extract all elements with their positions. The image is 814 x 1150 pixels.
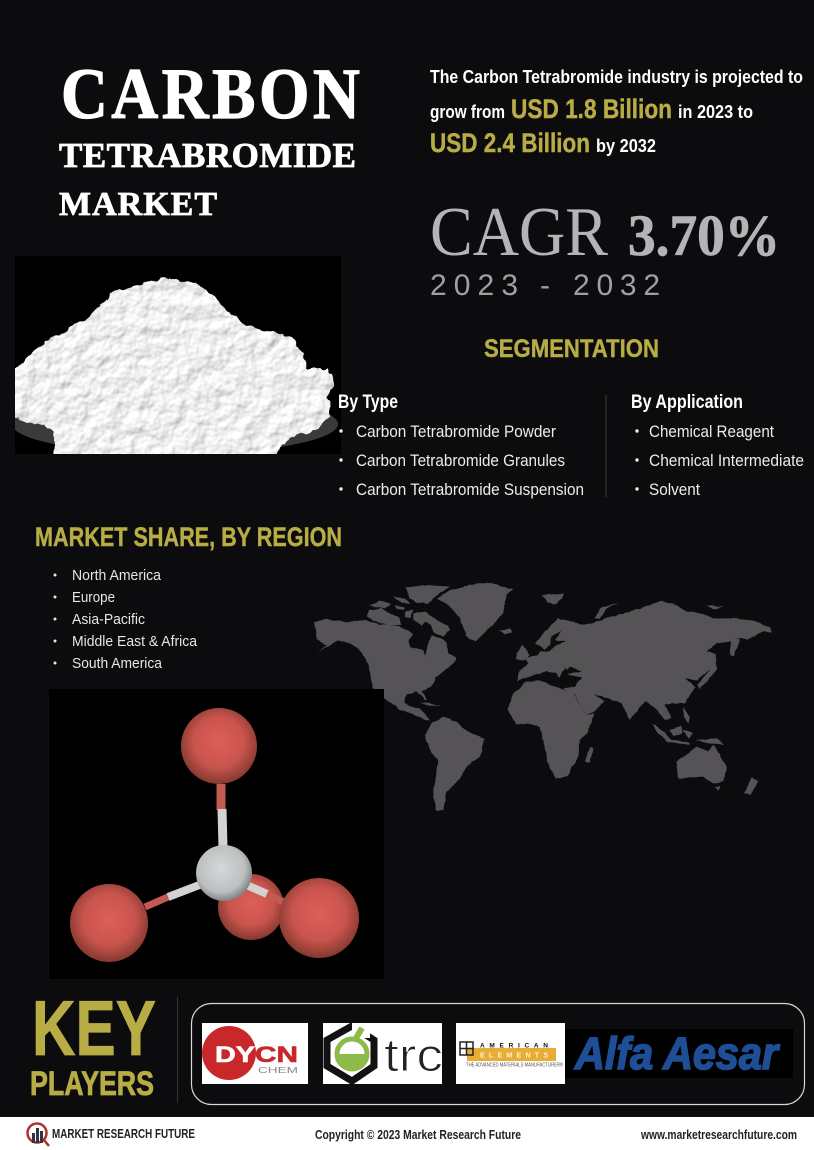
central carbon atom — [196, 845, 252, 901]
segment list: by type: Carbon Tetrabromide Suspension — [356, 480, 584, 499]
CAGR figure: 2023 — [430, 269, 518, 302]
title: CARBON — [61, 54, 363, 134]
bonds — [145, 784, 284, 907]
text block: market projection: by 2032 — [596, 136, 656, 156]
heading: market share by region: MARKET SHARE, BY REGION — [35, 522, 342, 552]
segment list: by type: By Type — [338, 392, 398, 413]
title — [59, 54, 363, 223]
image: carbon tetrabromide molecule — [49, 689, 384, 979]
segment list: by type — [338, 392, 584, 499]
left bromine atom — [70, 884, 148, 962]
CAGR figure: CAGR — [430, 194, 608, 271]
right bromine atom — [279, 878, 359, 958]
CAGR figure — [430, 194, 780, 302]
footer: MARKET RESEARCH FUTURE — [52, 1126, 195, 1141]
region list: North America — [72, 567, 162, 584]
title: TETRABROMIDE — [59, 136, 356, 175]
panel: key player logos — [192, 1004, 804, 1104]
text block: market projection — [430, 67, 803, 158]
region list: Europe — [72, 589, 115, 606]
segment list: by type: Carbon Tetrabromide Granules — [356, 451, 565, 470]
heading: key players — [30, 984, 156, 1103]
footer: Copyright © 2023 Market Research Future — [315, 1127, 521, 1142]
logo: American Elements: ELEMENTS — [480, 1052, 548, 1060]
region list: Asia-Pacific — [72, 611, 145, 628]
world map — [314, 582, 772, 811]
logo: DYCN Chem: CN — [255, 1042, 298, 1067]
region list: Middle East & Africa — [72, 633, 198, 650]
logo: American Elements: AMERICAN — [480, 1042, 548, 1050]
text block: market projection: USD 1.8 Billion — [511, 94, 672, 124]
heading: key players: PLAYERS — [30, 1065, 154, 1103]
text block: market projection: grow from — [430, 102, 505, 122]
region list — [54, 567, 198, 672]
image: white powder pile — [8, 256, 341, 462]
text block: market projection: USD 2.4 Billion — [430, 128, 590, 158]
back bromine atom — [218, 874, 284, 940]
footer — [0, 1117, 814, 1150]
logo: TRC: trc — [384, 1029, 443, 1081]
CAGR figure: - — [540, 269, 550, 302]
logo: Alfa Aesar: Alfa Aesar — [574, 1028, 780, 1079]
segment list: by application: Solvent — [649, 480, 700, 499]
icon: market research future logo — [28, 1124, 49, 1146]
segment list: by application: Chemical Intermediate — [649, 451, 804, 470]
heading: segmentation: SEGMENTATION — [484, 335, 659, 363]
heading: key players: KEY — [32, 984, 156, 1072]
segment list: by application: Chemical Reagent — [649, 422, 774, 441]
logo: American Elements — [456, 1023, 565, 1084]
logo: American Elements: THE ADVANCED MATERIALS MANUFACTURER® — [466, 1062, 563, 1068]
segment list: by application — [631, 392, 804, 499]
segment list: by application: By Application — [631, 392, 743, 413]
CAGR figure: 3.70% — [628, 203, 780, 268]
region list: South America — [72, 655, 163, 672]
top bromine atom — [181, 708, 257, 784]
logo: DYCN Chem: CHEM — [258, 1065, 298, 1075]
CAGR figure: 2032 — [573, 269, 660, 302]
title: MARKET — [59, 186, 217, 223]
logo: DYCN Chem: DY — [215, 1042, 255, 1067]
text block: market projection: in 2023 to — [678, 102, 753, 122]
segment list: by type: Carbon Tetrabromide Powder — [356, 422, 556, 441]
logo: DYCN Chem — [202, 1023, 308, 1084]
logo: TRC — [323, 1023, 443, 1084]
